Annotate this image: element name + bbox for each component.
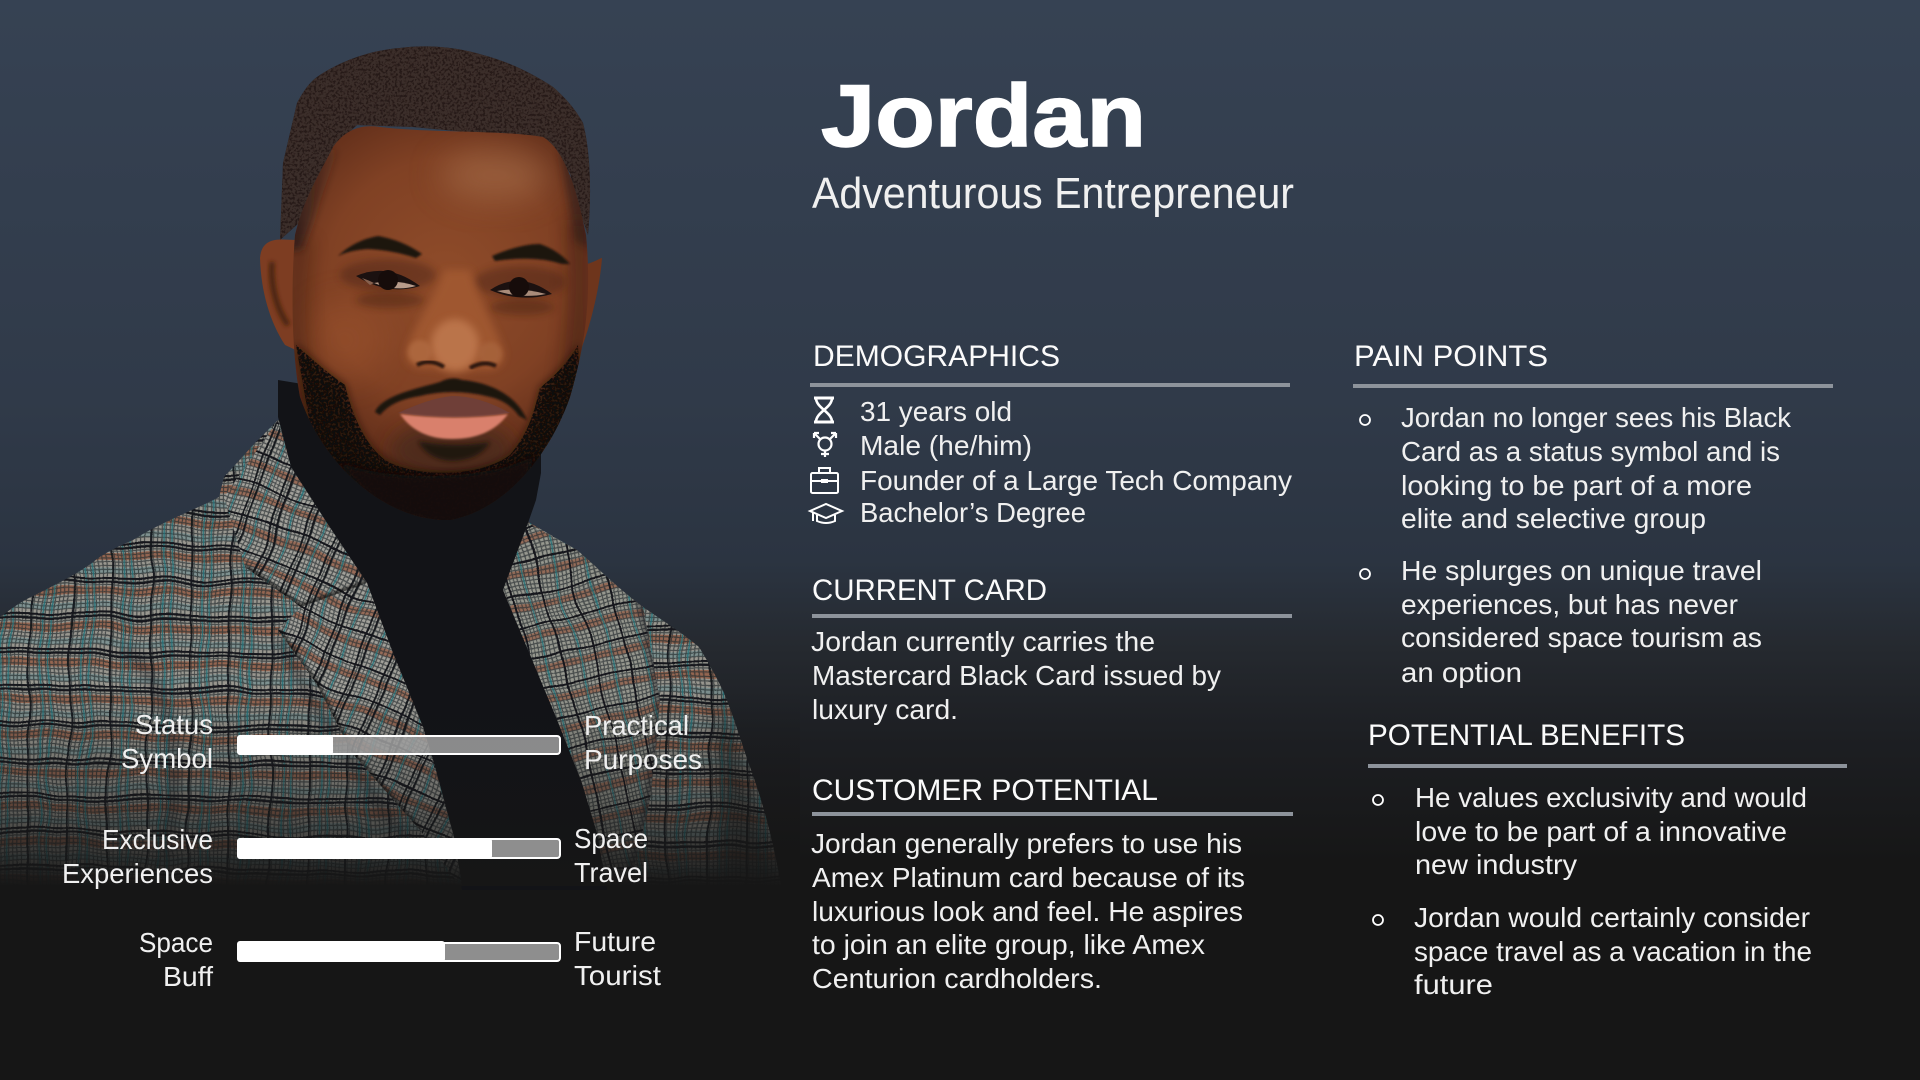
customer potential text — [811, 828, 1245, 994]
panel: customer potential — [811, 774, 1293, 994]
demographic list: Bachelor’s Degree — [860, 497, 1086, 528]
current card text: Mastercard Black Card issued by — [812, 660, 1221, 691]
bullet point 2: experiences, but has never — [1401, 589, 1738, 620]
benefit 1: love to be part of a innovative — [1415, 816, 1787, 847]
bullet point 2 — [1360, 555, 1762, 688]
bullet point 1: Jordan no longer sees his Black — [1401, 402, 1792, 433]
icon: graduation cap — [810, 504, 842, 523]
icon: hourglass — [814, 398, 834, 422]
slider: space buff vs future tourist: Future — [574, 926, 656, 957]
hair — [280, 46, 590, 240]
customer potential text: Centurion cardholders. — [812, 963, 1102, 994]
title: Jordan — [821, 66, 1146, 165]
subtitle: Adventurous Entrepreneur — [812, 169, 1294, 218]
mustache — [375, 378, 527, 420]
right ear — [570, 258, 602, 350]
portrait photo of Jordan — [0, 46, 820, 900]
customer potential text: luxurious look and feel. He aspires — [812, 896, 1243, 927]
benefit 2: space travel as a vacation in the — [1414, 936, 1812, 967]
turtleneck and black shirt — [278, 380, 607, 890]
icon: gender symbol — [814, 433, 836, 457]
benefit 1: new industry — [1415, 849, 1577, 880]
benefit 1 — [1373, 782, 1807, 880]
slider: status symbol vs practical purposes — [121, 709, 702, 775]
slider: exclusive experiences vs space travel: Travel — [574, 857, 648, 888]
customer potential text: to join an elite group, like Amex — [812, 929, 1205, 960]
forehead highlight — [440, 149, 550, 201]
left lapel — [278, 583, 460, 878]
bullet point 2: considered space tourism as — [1401, 622, 1762, 653]
heading: pain points: PAIN POINTS — [1354, 340, 1548, 373]
panel: pain points — [1353, 340, 1833, 688]
demographic list: Male (he/him) — [860, 430, 1032, 461]
goatee — [418, 441, 490, 461]
slider: space buff vs future tourist: Space — [139, 927, 213, 958]
skin around mouth shade — [388, 417, 514, 470]
benefit 1: He values exclusivity and would — [1415, 782, 1807, 813]
slider: space buff vs future tourist: Buff — [163, 961, 213, 992]
bullet point 1 — [1360, 402, 1792, 534]
current card text: Jordan currently carries the — [811, 626, 1155, 657]
heading: demographics: DEMOGRAPHICS — [813, 340, 1060, 373]
lower beard — [342, 458, 533, 520]
benefit 2 — [1373, 902, 1812, 1000]
bottom fade on jacket — [0, 690, 800, 886]
slider: status symbol vs practical purposes: Practical — [584, 710, 689, 741]
bullet point 2: He splurges on unique travel — [1401, 555, 1762, 586]
panel: demographics — [810, 340, 1292, 528]
panel: potential benefits — [1368, 719, 1847, 1000]
slider: status symbol vs practical purposes: Purposes — [584, 744, 702, 775]
panel: current card — [811, 574, 1292, 725]
current card text — [811, 626, 1221, 725]
icon: briefcase — [811, 468, 838, 493]
benefit 2: future — [1414, 969, 1493, 1000]
bullet point 1: Card as a status symbol and is — [1401, 436, 1780, 467]
right eye — [490, 277, 552, 298]
left eye — [356, 270, 420, 290]
slider scales — [62, 709, 702, 992]
slider: status symbol vs practical purposes: Symbol — [121, 743, 213, 774]
eye socket shadows — [340, 259, 566, 315]
right eyebrow — [492, 244, 570, 264]
heading: customer potential: CUSTOMER POTENTIAL — [812, 774, 1158, 807]
current card text: luxury card. — [812, 694, 958, 725]
bullet point 2: an option — [1401, 657, 1522, 688]
slider: exclusive experiences vs space travel — [62, 823, 648, 889]
slider: exclusive experiences vs space travel: Exclusive — [102, 824, 213, 855]
side shadows — [292, 244, 314, 398]
slider: status symbol vs practical purposes: Status — [135, 709, 213, 740]
customer potential text: Amex Platinum card because of its — [812, 862, 1245, 893]
heading: potential benefits: POTENTIAL BENEFITS — [1368, 719, 1685, 752]
bullet point 1: elite and selective group — [1401, 503, 1706, 534]
left eyebrow — [338, 236, 422, 258]
demographic list: Founder of a Large Tech Company — [860, 465, 1292, 496]
beard stubble grain — [296, 345, 580, 530]
nose — [406, 270, 504, 372]
demographic list: 31 years old — [860, 396, 1012, 427]
right collar and lapel — [503, 523, 660, 878]
benefit 2: Jordan would certainly consider — [1414, 902, 1810, 933]
bullet point 1: looking to be part of a more — [1401, 470, 1752, 501]
beard stubble base — [296, 345, 580, 530]
slider: space buff vs future tourist: Tourist — [574, 960, 661, 991]
slider: exclusive experiences vs space travel: Space — [574, 823, 648, 854]
left collar — [224, 420, 367, 607]
slider: exclusive experiences vs space travel: Experiences — [62, 858, 213, 889]
left ear — [260, 240, 300, 352]
demographic list — [860, 396, 1292, 528]
temple fade — [294, 150, 336, 254]
face — [286, 126, 590, 530]
slider: space buff vs future tourist — [139, 926, 661, 992]
lips — [398, 396, 510, 439]
jacket — [0, 420, 778, 878]
heading: current card: CURRENT CARD — [812, 574, 1047, 607]
customer potential text: Jordan generally prefers to use his — [811, 828, 1242, 859]
